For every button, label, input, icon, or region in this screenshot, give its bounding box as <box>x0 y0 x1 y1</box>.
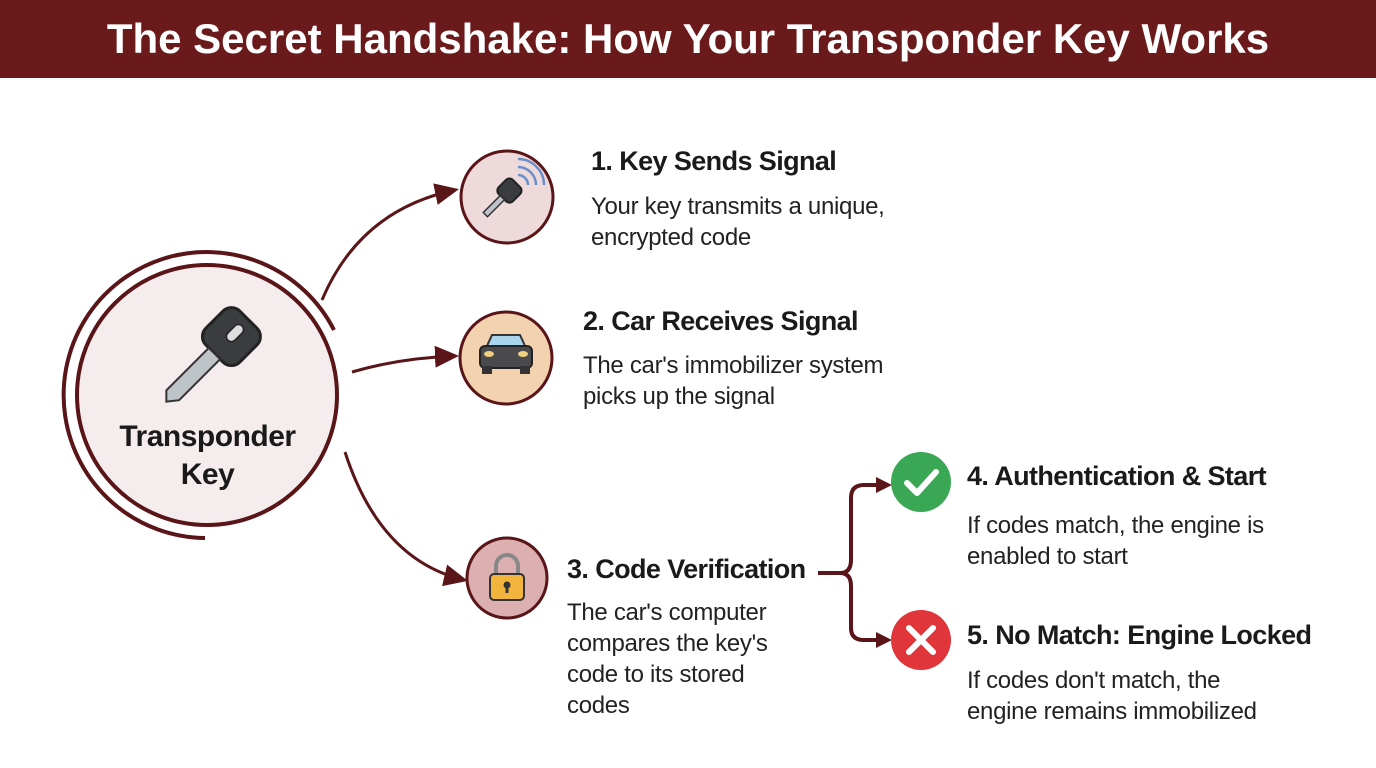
icon: check <box>891 452 951 512</box>
label: Transponder Key <box>119 420 296 491</box>
step 5 <box>967 620 1311 725</box>
step 5: 5. No Match: Engine Locked <box>967 620 1311 650</box>
step 3: codes <box>567 692 630 719</box>
step 5: engine remains immobilized <box>967 698 1257 725</box>
label: Transponder Key: Key <box>181 458 234 491</box>
step 3: The car's computer <box>567 599 766 626</box>
icon: key signal <box>461 151 553 243</box>
step 3 <box>567 554 806 719</box>
label: Transponder Key: Transponder <box>119 420 296 453</box>
step 3: compares the key's <box>567 630 768 657</box>
step 3: code to its stored <box>567 661 744 688</box>
central key circle <box>64 252 337 538</box>
step 4: If codes match, the engine is <box>967 512 1264 539</box>
icon: cross <box>891 610 951 670</box>
step 1: 1. Key Sends Signal <box>591 146 836 176</box>
step 5: If codes don't match, the <box>967 667 1220 694</box>
step 4: enabled to start <box>967 543 1128 570</box>
step 2: The car's immobilizer system <box>583 352 883 379</box>
arrows from key <box>322 190 464 580</box>
icon: car <box>460 312 552 404</box>
step 1: Your key transmits a unique, <box>591 193 885 220</box>
step 2: 2. Car Receives Signal <box>583 306 858 336</box>
icon: padlock <box>467 538 547 618</box>
step 4: 4. Authentication & Start <box>967 461 1266 491</box>
step 1: encrypted code <box>591 224 751 251</box>
step 2 <box>583 306 883 410</box>
step 3: 3. Code Verification <box>567 554 806 584</box>
title <box>0 0 1376 78</box>
step 4 <box>967 461 1266 570</box>
title: The Secret Handshake: How Your Transponder Key Works <box>107 15 1269 62</box>
step 1 <box>591 146 885 251</box>
branch arrows <box>818 485 888 640</box>
step 2: picks up the signal <box>583 383 775 410</box>
